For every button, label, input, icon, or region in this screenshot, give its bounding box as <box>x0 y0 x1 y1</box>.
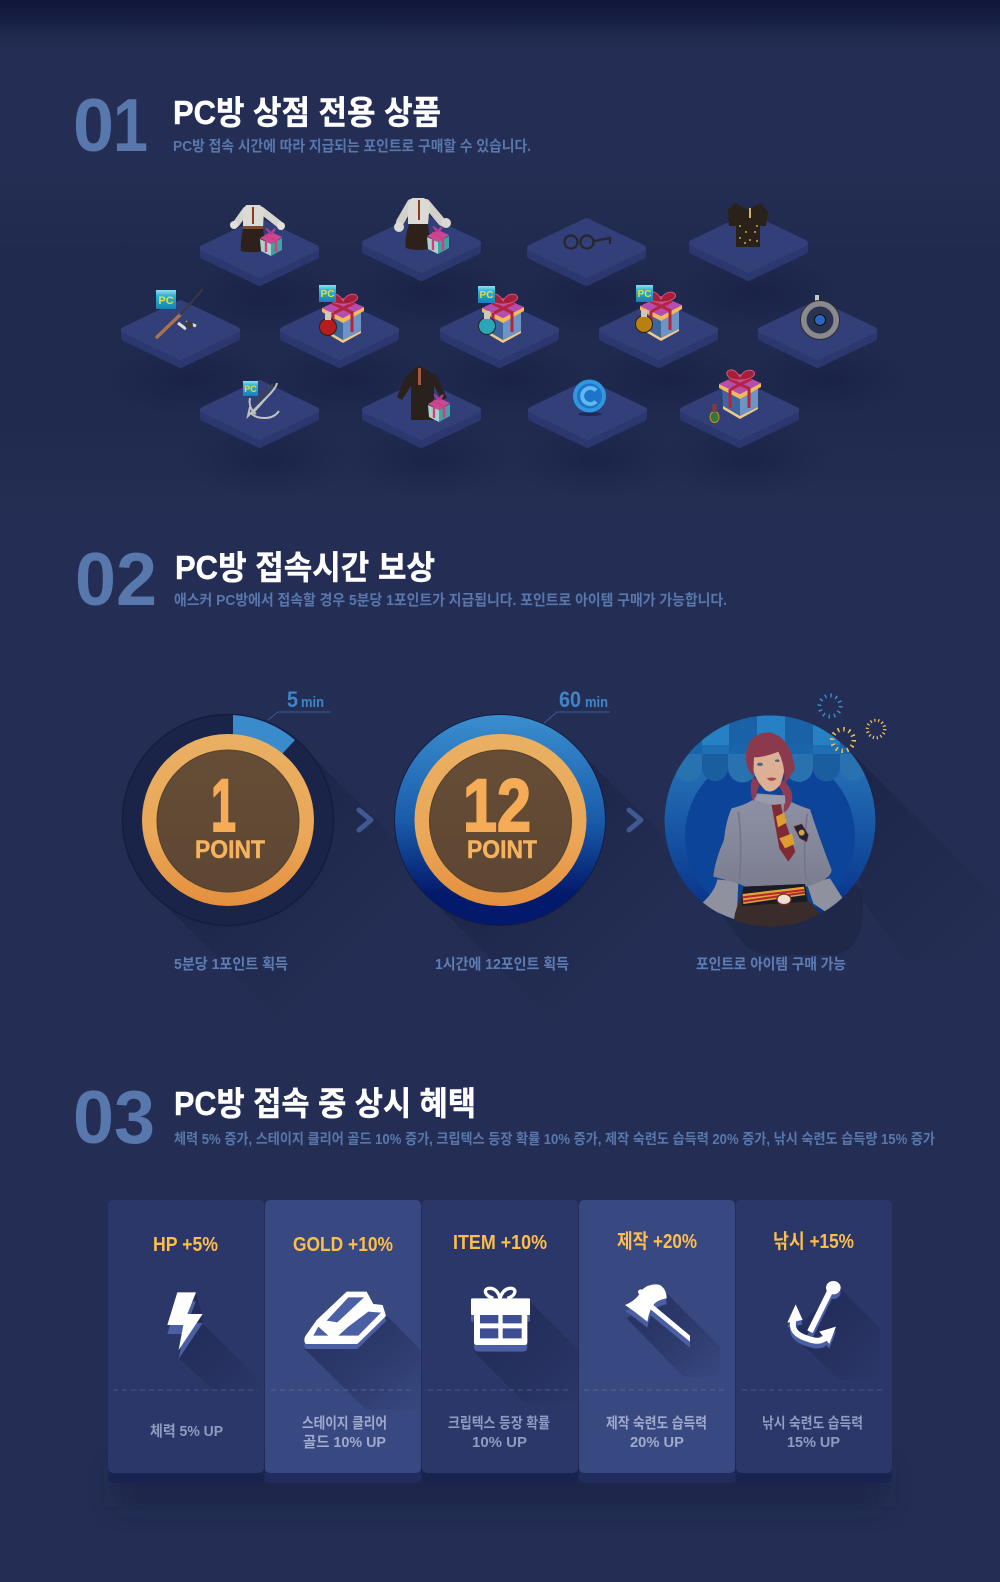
reward circle: 60 min: POINT <box>467 836 537 864</box>
label: 5 min: min <box>301 694 324 711</box>
card: HP: HP +5% <box>153 1234 218 1256</box>
icon: red potion and gift <box>319 285 364 343</box>
caption: buy items: 포인트로 아이템 구매 가능 <box>696 956 846 973</box>
section 02 heading: 애스커 PC방에서 접속할 경우 5분당 1포인트가 지급됩니다. 포인트로 아이템 구매가 가능합니다. <box>174 592 727 609</box>
card: HP: 체력 5% UP <box>150 1423 223 1440</box>
long shadow: circle 2 <box>426 746 704 1024</box>
section 02 heading: 0 <box>75 537 116 621</box>
shop awning <box>676 716 864 782</box>
card: fishing: 낚시 숙련도 습득력 <box>762 1415 863 1432</box>
panel: shop item tiles <box>104 216 910 498</box>
icon: round glasses <box>564 236 610 248</box>
icon: lightning bolt <box>167 1292 263 1390</box>
card: craft: 20% UP <box>630 1434 684 1451</box>
icon: gold potion and gift <box>636 285 682 341</box>
arrow: chevron 2 <box>629 810 641 830</box>
section 03 heading: PC방 접속 중 상시 혜택 <box>174 1085 476 1122</box>
icon: fishing rod with PC badge: PC <box>158 295 174 307</box>
card: craft <box>579 1200 735 1483</box>
card: fishing: 15% UP <box>787 1434 840 1451</box>
card: fishing: 낚시 +15% <box>773 1230 854 1253</box>
section 03 heading: 0 <box>73 1075 114 1159</box>
icon: fish hook with PC badge: PC <box>244 384 257 394</box>
character shop circle <box>664 715 876 933</box>
section 01 heading: 0 <box>73 83 114 167</box>
label: 60 min <box>544 687 610 723</box>
icon: school uniform with gift <box>230 205 285 256</box>
icon: gold potion and gift: PC <box>638 289 651 300</box>
label: 5 min <box>268 687 331 720</box>
card: fishing <box>736 1200 892 1483</box>
reward circle: 5 min <box>122 714 334 926</box>
section 03 heading: 3 <box>114 1075 155 1159</box>
reward circle: 60 min <box>394 714 606 926</box>
section 02 heading <box>75 537 727 621</box>
label: 5 min: 5 <box>287 687 298 712</box>
section 03 heading <box>73 1075 935 1159</box>
icon: blue potion and gift: PC <box>480 290 493 301</box>
card: craft: 제작 숙련도 습득력 <box>606 1415 707 1432</box>
long shadow: circle 1 <box>154 746 432 1024</box>
arrow: chevron 1 <box>359 810 371 830</box>
card: GOLD: 골드 10% UP <box>303 1434 386 1451</box>
card: ITEM: 크립텍스 등장 확률 <box>448 1415 550 1432</box>
icon: frilled uniform with gift <box>394 198 451 254</box>
icon: gold bars <box>304 1292 421 1410</box>
card: ITEM: 10% UP <box>472 1434 527 1451</box>
icon: blue potion and gift <box>478 286 524 343</box>
caption: 60 min reward: 1시간에 12포인트 획득 <box>435 956 569 973</box>
card: HP <box>108 1200 264 1483</box>
section 03 heading: 체력 5% 증가, 스테이지 클리어 골드 10% 증가, 크립텍스 등장 확률 10% 증가, 제작 숙련도 습득력 20% 증가, 낚시 숙련도 습득량 15% 증가 <box>174 1131 935 1148</box>
icon: red potion and gift: PC <box>321 289 334 300</box>
label: 60 min: 60 <box>559 687 581 712</box>
section 01 heading: PC방 상점 전용 상품 <box>173 94 441 131</box>
icon: black suit with gift <box>397 366 450 422</box>
card: craft: 제작 +20% <box>617 1230 697 1253</box>
reward circle: 5 min: POINT <box>195 836 265 864</box>
section 01 heading: 1 <box>113 83 148 167</box>
icon: fish hook with PC badge <box>243 381 279 418</box>
card: GOLD: GOLD +10% <box>293 1234 393 1256</box>
fireworks <box>820 696 885 751</box>
icon: silver medallion <box>800 295 840 340</box>
icon: blue C coin <box>573 380 606 416</box>
caption: 5 min reward: 5분당 1포인트 획득 <box>174 956 288 973</box>
section 02 heading: 2 <box>116 537 157 621</box>
reward circle: 60 min: 12 <box>463 764 531 847</box>
reward circle: 5 min: 1 <box>211 764 236 847</box>
long shadow: circle 3 <box>845 746 1000 960</box>
card: GOLD: 스테이지 클리어 <box>302 1415 387 1432</box>
icon: anchor hook <box>787 1281 880 1380</box>
card: ITEM <box>422 1200 580 1483</box>
icon: studded dark coat <box>728 203 768 247</box>
icon: large gift and small potion <box>710 370 761 422</box>
blue progress wedge <box>233 715 295 770</box>
icon: fishing rod with PC badge <box>156 289 203 337</box>
section 01 heading <box>73 83 531 167</box>
icon: gift box <box>471 1288 580 1403</box>
section 02 heading: PC방 접속시간 보상 <box>175 549 435 586</box>
label: 60 min: min <box>585 694 608 711</box>
card: ITEM: ITEM +10% <box>453 1232 547 1254</box>
card row shadow <box>115 1465 885 1507</box>
character figure <box>702 732 843 933</box>
card: GOLD <box>265 1200 421 1483</box>
icon: axe <box>625 1284 720 1377</box>
long shadow: character <box>710 880 863 955</box>
section 01 heading: PC방 접속 시간에 따라 지급되는 포인트로 구매할 수 있습니다. <box>173 138 531 155</box>
